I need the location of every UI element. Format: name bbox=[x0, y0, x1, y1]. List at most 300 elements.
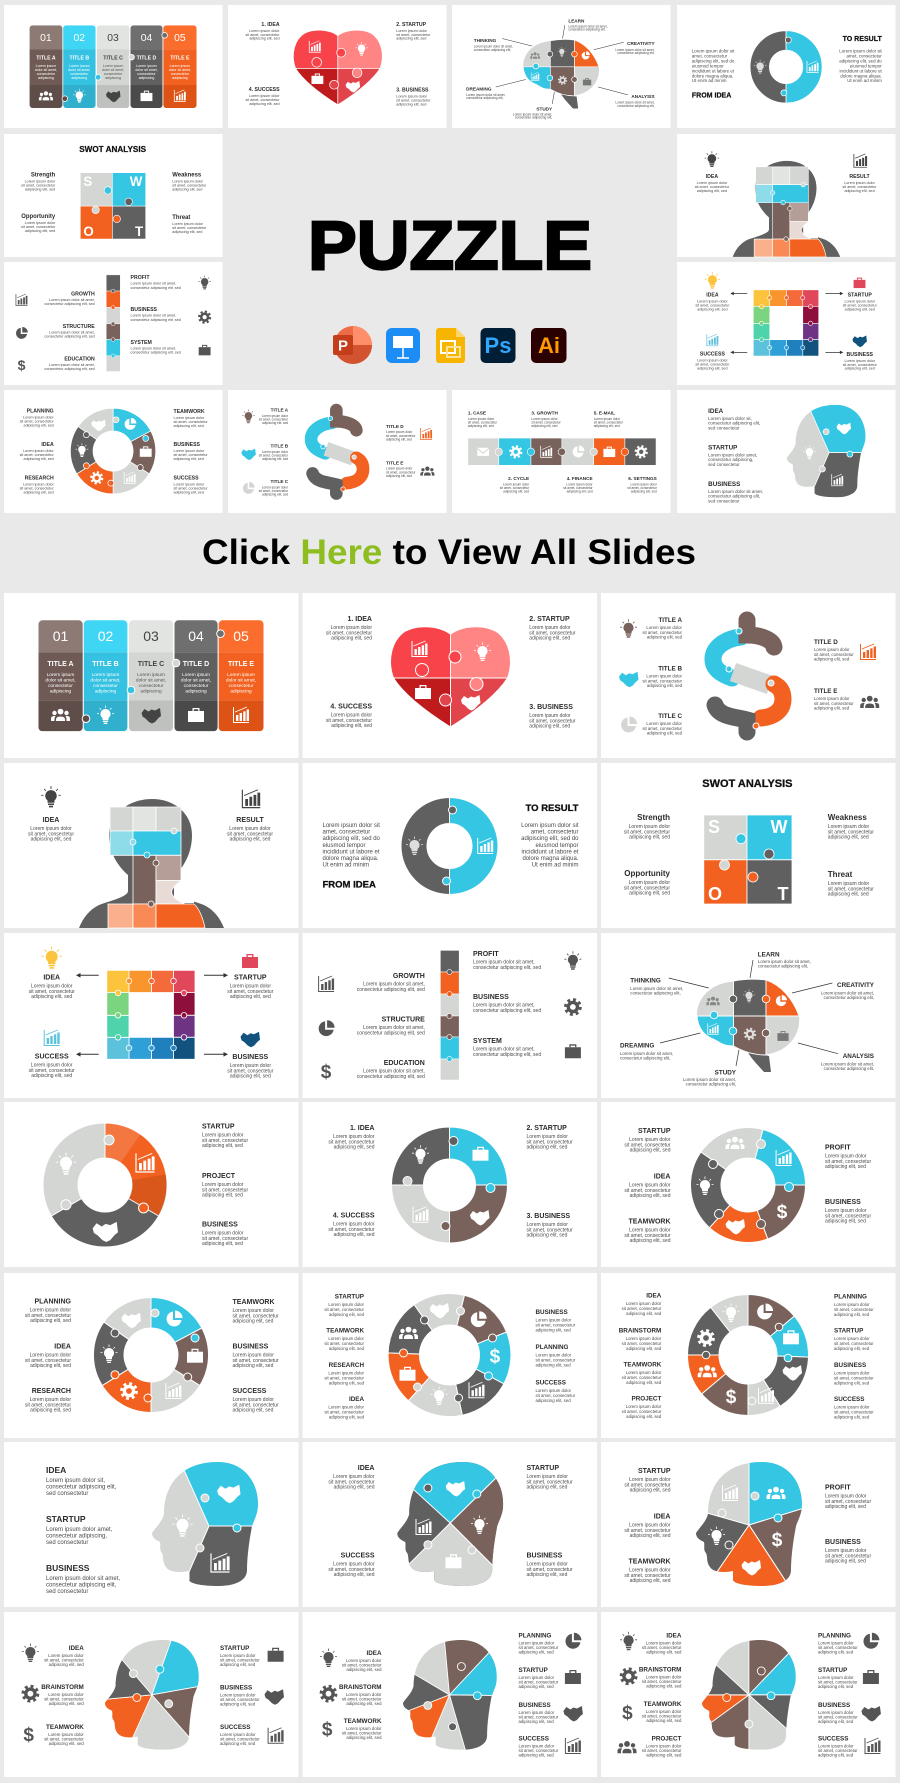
text: research bbox=[324, 1362, 365, 1386]
text: business: BUSINESS bbox=[825, 1539, 861, 1546]
text: research: Lorem ipsum dolor bbox=[30, 1397, 71, 1403]
text: profit: Lorem ipsum dolor bbox=[825, 1154, 867, 1160]
text: study: Lorem ipsum dolor sit amet, bbox=[683, 1077, 736, 1082]
text: success: SUCCESS bbox=[341, 1552, 375, 1560]
text: idea: adipiscing elit, sed bbox=[49, 1662, 84, 1667]
text: idea bbox=[342, 1650, 382, 1672]
text: right paragraph: Ut enim ad minim bbox=[532, 863, 578, 869]
text: success: adipiscing elit, sed bbox=[334, 1572, 375, 1578]
chart: head puzzle bbox=[385, 1622, 509, 1764]
chart: head puzzle bbox=[387, 1442, 512, 1602]
text: threat bbox=[828, 870, 874, 898]
thumbnail text and icons: dolore magna aliqua. bbox=[840, 73, 882, 78]
thumbnail text and icons: BUSINESS bbox=[131, 307, 158, 313]
thumbnail text, arrows and icons: Lorem ipsum dolor bbox=[844, 359, 876, 363]
thumbnail text and icons: sit amet, consectetur bbox=[468, 420, 498, 424]
text: startup: adipiscing elit, sed bbox=[834, 1346, 870, 1351]
text: column bodies: Lorem ipsum bbox=[47, 672, 74, 678]
text: startup: Lorem ipsum dolor bbox=[220, 1653, 256, 1658]
text: business: BUSINESS bbox=[818, 1702, 850, 1709]
text: startup: adipiscing elit, sed bbox=[818, 1684, 854, 1689]
text: idea: adipiscing elit, sed bbox=[329, 1414, 365, 1420]
text: business: Lorem ipsum dolor bbox=[834, 1370, 870, 1376]
text: brainstorm: adipiscing elit, sed bbox=[49, 1701, 84, 1706]
thumbnail text and icons: Lorem ipsum dolor sit amet, bbox=[49, 363, 95, 367]
thumbnail text and icons: Lorem ipsum bbox=[103, 64, 123, 68]
text: startup: sit amet, consectetur bbox=[834, 1341, 874, 1346]
thumbnail text and icons: sit amet, consectetur bbox=[174, 486, 208, 490]
text: profit: PROFIT bbox=[473, 951, 499, 958]
letters: T bbox=[778, 884, 788, 904]
thumbnail text and icons: adipiscing elit, sed bbox=[594, 424, 620, 428]
thumbnail text and icons: Lorem ipsum dolor bbox=[174, 416, 205, 420]
thumbnail: six-part ring bbox=[4, 390, 223, 513]
thumbnail text and icons: sed consectetur bbox=[708, 499, 740, 504]
panel: SWOT bbox=[601, 763, 896, 928]
thumbnail text and icons: SYSTEM bbox=[131, 340, 152, 346]
thumbnail text and icons: $ bbox=[18, 357, 26, 373]
text: idea: sit amet, consectetur bbox=[328, 1139, 375, 1145]
thumbnail text and icons: TITLE A bbox=[36, 55, 56, 61]
panel: heart puzzle bbox=[302, 593, 597, 758]
icons: side icons bbox=[22, 1644, 284, 1746]
thumbnail text and icons: adipiscing bbox=[172, 76, 188, 80]
thumbnail text and icons: sit amet, consectetur bbox=[174, 420, 208, 424]
text: research: adipiscing elit, sed bbox=[329, 1380, 365, 1386]
text: title a: Lorem ipsum dolor bbox=[646, 625, 683, 630]
text: thinking: THINKING bbox=[630, 978, 661, 984]
text: research: adipiscing elit, sed bbox=[30, 1408, 71, 1414]
text: business: Lorem ipsum dolor bbox=[230, 1063, 271, 1069]
text: learn: consectetur adipiscing elit, bbox=[758, 964, 808, 968]
thumbnail text and icons: sit amet, consectetur bbox=[386, 470, 416, 474]
chart: brain puzzle bbox=[696, 979, 800, 1072]
text: business: BUSINESS bbox=[202, 1222, 238, 1228]
text: idea: sit amet, consectetur bbox=[328, 1479, 375, 1485]
icons: ring icons bbox=[412, 1145, 490, 1226]
text: startup bbox=[529, 616, 576, 642]
thumbnail text: Lorem ipsum dolor bbox=[172, 222, 204, 226]
text: success: sit amet, consectetur bbox=[29, 1068, 75, 1074]
text: title e: Lorem ipsum dolor bbox=[814, 696, 850, 701]
text: idea: adipiscing elit, sed bbox=[334, 1145, 375, 1151]
thumbnail text, leaders and icons: Lorem ipsum dolor sit amet, bbox=[513, 112, 552, 116]
text: startup: STARTUP bbox=[335, 1294, 364, 1300]
text: brainstorm: Lorem ipsum dolor bbox=[346, 1692, 382, 1697]
text: business: adipiscing elit, sed bbox=[232, 1363, 274, 1369]
text: column bodies: adipiscing bbox=[50, 688, 71, 694]
text: opportunity: sit amet, consectetur bbox=[624, 885, 670, 891]
text: planning: Lorem ipsum dolor bbox=[536, 1352, 572, 1358]
text: startup: STARTUP bbox=[818, 1667, 847, 1674]
text: business bbox=[536, 1309, 576, 1332]
text: success: Lorem ipsum dolor bbox=[834, 1404, 870, 1410]
text: title b bbox=[642, 666, 683, 688]
text: left paragraph: incididunt ut labore et bbox=[322, 849, 380, 855]
thumbnail text, leaders and icons: Lorem ipsum dolor sit amet, bbox=[474, 44, 513, 48]
text: title b: TITLE B bbox=[658, 666, 682, 672]
text: planning: Lorem ipsum dolor bbox=[30, 1308, 71, 1314]
text: business: sit amet, consectetur bbox=[227, 1068, 274, 1074]
thumbnail text and icons: 2. STARTUP bbox=[396, 22, 427, 28]
thumbnail text and icons: dolor sit amet, bbox=[135, 68, 158, 72]
thumbnail text and icons: incididunt ut labore et bbox=[840, 68, 883, 73]
thumbnail text and icons: adipiscing elit, sed bbox=[249, 102, 280, 106]
text: business: BUSINESS bbox=[473, 994, 509, 1001]
text: startup: sit amet, consectetur bbox=[202, 1138, 248, 1144]
icons: head icons: $ bbox=[772, 1530, 783, 1551]
thumbnail text and icons: Lorem ipsum dolor sit amet, bbox=[49, 298, 95, 302]
text: teamwork: TEAMWORK bbox=[326, 1328, 364, 1334]
thumbnail text bbox=[21, 145, 207, 239]
thumbnail text, leaders and icons: Lorem ipsum dolor sit amet, bbox=[568, 24, 608, 28]
text: weakness: Weakness bbox=[828, 813, 867, 822]
thumbnail text and icons: adipiscing bbox=[139, 76, 154, 80]
text: business bbox=[232, 1344, 279, 1369]
text: teamwork: Lorem ipsum dolor bbox=[48, 1732, 84, 1737]
chart: head puzzle bbox=[686, 1442, 811, 1620]
text: threat: Threat bbox=[828, 870, 853, 879]
text: brainstorm bbox=[339, 1684, 382, 1706]
thumbnail text and icons bbox=[708, 408, 851, 504]
panel: five-part ring bbox=[601, 1102, 896, 1267]
text: planning: PLANNING bbox=[536, 1344, 568, 1351]
text: brainstorm: BRAINSTORM bbox=[41, 1684, 84, 1691]
text: column titles: TITLE C bbox=[138, 661, 164, 668]
thumbnail text: Weakness bbox=[172, 172, 202, 178]
thumbnail text and icons: Lorem ipsum dolor bbox=[844, 181, 876, 185]
text: idea bbox=[28, 817, 74, 843]
text: strength: Strength bbox=[637, 813, 670, 822]
text: brainstorm: sit amet, consectetur bbox=[622, 1341, 662, 1346]
thumbnail text and icons: sit amet, consectetur bbox=[245, 33, 280, 37]
thumbnail text and icons: Lorem ipsum dolor bbox=[503, 482, 530, 486]
text: structure: Lorem ipsum dolor sit amet, bbox=[363, 1025, 425, 1031]
text: brainstorm: Lorem ipsum dolor bbox=[646, 1674, 682, 1680]
text: project: sit amet, consectetur bbox=[202, 1187, 248, 1193]
panel: seven-part ring bbox=[302, 1273, 597, 1438]
text: project: PROJECT bbox=[632, 1396, 661, 1402]
text: startup bbox=[202, 1124, 248, 1149]
thumbnail text and icons: Lorem ipsum dolor bbox=[23, 482, 54, 486]
thumbnail text and icons: adipiscing bbox=[38, 76, 54, 80]
panel: six-part ring bbox=[4, 1273, 298, 1438]
text: success: 4. SUCCESS bbox=[333, 1212, 375, 1220]
thumbnail text and icons: sit amet, consectetur bbox=[563, 486, 594, 490]
thumbnail text and icons: Lorem ipsum dolor bbox=[23, 416, 54, 420]
text: opportunity: Lorem ipsum dolor bbox=[629, 880, 670, 886]
text: idea: sit amet, consectetur bbox=[324, 1410, 365, 1414]
text: planning: adipiscing elit, sed bbox=[818, 1649, 854, 1654]
thumbnail text and icons: STRUCTURE bbox=[63, 324, 95, 330]
text: result: sit amet, consectetur bbox=[227, 831, 273, 837]
text: growth: Lorem ipsum dolor sit amet, bbox=[363, 982, 425, 988]
text: idea: Lorem ipsum dolor sit, bbox=[46, 1478, 105, 1484]
thumbnail text, leaders and icons: consectetur adipiscing elit, bbox=[617, 51, 655, 55]
thumbnail: dollar sign bbox=[228, 390, 447, 513]
text: success: adipiscing elit, sed bbox=[818, 1752, 854, 1757]
text: startup: STARTUP bbox=[234, 974, 267, 982]
icon: Photoshop bbox=[480, 328, 516, 363]
text: profit: PROFIT bbox=[825, 1144, 851, 1152]
text: startup: sit amet, consectetur bbox=[518, 1679, 559, 1684]
thumbnail text: Strength bbox=[31, 172, 56, 178]
text: success: SUCCESS bbox=[220, 1724, 250, 1731]
text: startup: adipiscing elit, sed bbox=[529, 636, 570, 642]
text: planning: sit amet, consectetur bbox=[518, 1645, 559, 1650]
text: startup: sit amet, consectetur bbox=[818, 1679, 858, 1684]
text: business bbox=[818, 1702, 858, 1724]
thumbnail text and icons: TITLE B bbox=[70, 55, 89, 61]
text: success: adipiscing elit, sed bbox=[331, 723, 372, 729]
text: success: SUCCESS bbox=[518, 1736, 549, 1742]
thumbnail text and icons: TITLE C bbox=[103, 55, 123, 61]
text: column bodies: dolor sit amet, bbox=[136, 678, 166, 684]
text: title a bbox=[642, 617, 683, 640]
text: startup: sit amet, consectetur bbox=[526, 1139, 573, 1145]
thumbnail text and icons: Lorem ipsum bbox=[170, 64, 190, 68]
icons: side icons bbox=[318, 951, 581, 1083]
thumbnail text and icons: RESEARCH bbox=[25, 475, 54, 481]
thumbnail text: adipiscing elit, sed bbox=[25, 187, 55, 191]
text: brainstorm: sit amet, consectetur bbox=[342, 1696, 382, 1701]
thumbnail text: adipiscing elit, sed bbox=[172, 230, 202, 234]
text: business bbox=[202, 1222, 248, 1247]
numbers: 05 bbox=[233, 628, 249, 644]
text: dreaming: Lorem ipsum dolor sit amet, bbox=[620, 1051, 673, 1056]
text: idea bbox=[624, 1514, 671, 1539]
text: planning: sit amet, consectetur bbox=[536, 1358, 576, 1362]
text: startup bbox=[818, 1667, 858, 1689]
text: weakness: Lorem ipsum dolor bbox=[828, 824, 870, 830]
text: business: sit amet, consectetur bbox=[220, 1697, 260, 1702]
text: teamwork: sit amet, consectetur bbox=[624, 1573, 671, 1579]
text: business bbox=[825, 1199, 871, 1225]
text: business: Lorem ipsum dolor bbox=[536, 1318, 572, 1322]
thumbnail text and icons: 3. BUSINESS bbox=[396, 87, 429, 93]
chart: ring bbox=[93, 1298, 209, 1412]
text: idea bbox=[642, 1633, 682, 1654]
text: column bodies: dolor sit amet, bbox=[45, 678, 76, 684]
numbers: 03 bbox=[143, 628, 159, 644]
text: planning: sit amet, consectetur bbox=[25, 1313, 71, 1319]
text: idea: adipiscing elit, sed bbox=[646, 1650, 682, 1654]
thumbnail text: sit amet, consectetur bbox=[21, 225, 56, 229]
text: business bbox=[526, 1552, 573, 1578]
thumbnail text and icons: PLANNING bbox=[27, 409, 54, 415]
text: startup: STARTUP bbox=[46, 1514, 86, 1524]
text: success: adipiscing elit, sed bbox=[220, 1741, 256, 1746]
text: teamwork bbox=[642, 1701, 682, 1723]
thumbnail text and icons: consectetur adipiscing elit, bbox=[708, 494, 760, 499]
thumbnail text and icons: Lorem ipsum dolor sit bbox=[692, 49, 735, 54]
text: startup: adipiscing elit, sed bbox=[230, 994, 271, 1000]
text: business: BUSINESS bbox=[536, 1309, 568, 1316]
panel: head eight parts with icons bbox=[601, 1612, 896, 1777]
text: success bbox=[834, 1396, 874, 1420]
text: teamwork bbox=[44, 1724, 84, 1746]
text: thinking: consectetur adipiscing elit, bbox=[630, 990, 681, 996]
text: brainstorm: adipiscing elit, sed bbox=[346, 1701, 382, 1706]
thumbnail text and icons: Ut enim ad minim bbox=[847, 78, 882, 83]
text: title b: sit amet, consectetur bbox=[642, 678, 683, 683]
text: startup: sed consectetur bbox=[46, 1540, 88, 1546]
text: teamwork bbox=[624, 1558, 671, 1584]
thumbnail text, arrows and icons: adipiscing elit, sed bbox=[845, 307, 875, 312]
panel: eight-part ring bbox=[601, 1273, 896, 1438]
text: teamwork bbox=[624, 1218, 671, 1244]
icons: square corners bbox=[42, 947, 260, 1047]
text: startup: Lorem ipsum dolor bbox=[230, 984, 271, 990]
text: startup: Lorem ipsum dolor amet, bbox=[46, 1527, 113, 1533]
text: business: adipiscing elit, sed bbox=[202, 1241, 243, 1247]
text: project: Lorem ipsum dolor bbox=[646, 1744, 682, 1748]
text: startup: Lorem ipsum dolor bbox=[328, 1302, 365, 1307]
icons: ring icons: $ bbox=[726, 1387, 737, 1408]
text: business: Lorem ipsum dolor sit amet, bbox=[473, 1002, 535, 1008]
text: brainstorm: sit amet, consectetur bbox=[642, 1679, 682, 1684]
thumbnail text, leaders and icons: LEARN bbox=[568, 18, 585, 24]
thumbnail text, arrows and icons: BUSINESS bbox=[847, 352, 874, 358]
icon: PowerPoint: P bbox=[338, 338, 348, 354]
text: planning: PLANNING bbox=[818, 1632, 851, 1640]
thumbnail text and icons: TITLE A bbox=[271, 408, 289, 413]
text: startup bbox=[624, 1468, 671, 1494]
text: left paragraph: amet, consectetur bbox=[322, 830, 370, 836]
thumbnail text and icons: dolor sit amet, bbox=[35, 68, 57, 72]
text: teamwork: Lorem ipsum dolor bbox=[646, 1709, 682, 1714]
text: idea: sit amet, consectetur bbox=[25, 1358, 71, 1364]
text: business: adipiscing elit, sed bbox=[825, 1219, 866, 1225]
thumbnail text and icons bbox=[468, 411, 658, 494]
text: creativity: CREATIVITY bbox=[837, 982, 875, 989]
text: column bodies: dolor sit amet, bbox=[90, 678, 121, 684]
text: weakness: sit amet, consectetur bbox=[828, 829, 874, 835]
thumbnail text, arrows and icons: adipiscing elit, sed bbox=[845, 367, 875, 371]
panel: head five parts bbox=[601, 1442, 896, 1620]
thumbnail text and icons: adipiscing elit, sed bbox=[24, 490, 54, 494]
thumbnail text and icons: Lorem ipsum dolor bbox=[531, 417, 559, 421]
thumbnail text and icons: 6. SETTINGS bbox=[628, 476, 657, 481]
thumbnail text and icons: Lorem ipsum dolor bbox=[174, 482, 205, 486]
text: success: SUCCESS bbox=[232, 1388, 267, 1395]
text: teamwork: sit amet, consectetur bbox=[622, 1375, 662, 1380]
text: brainstorm: BRAINSTORM bbox=[339, 1684, 382, 1691]
text: success: SUCCESS bbox=[35, 1054, 69, 1060]
text: idea: adipiscing elit, sed bbox=[331, 636, 372, 642]
text: success: Lorem ipsum dolor bbox=[536, 1388, 572, 1393]
thumbnail text and icons: Lorem ipsum dolor bbox=[396, 94, 428, 98]
text: teamwork: adipiscing elit, sed bbox=[49, 1741, 84, 1746]
text: success: adipiscing elit, sed bbox=[536, 1398, 571, 1403]
thumbnail text and icons: sit amet, consectetur bbox=[259, 417, 289, 421]
text: startup bbox=[324, 1294, 365, 1317]
text: threat: sit amet, consectetur bbox=[828, 886, 874, 892]
chart: two part donut bbox=[401, 798, 498, 894]
thumbnail text and icons: sit amet, consectetur bbox=[20, 453, 54, 457]
thumbnail text and icons: Lorem ipsum dolor bbox=[174, 449, 205, 453]
text: business: Lorem ipsum dolor bbox=[232, 1352, 274, 1358]
thumbnail text and icons: sit amet, consectetur bbox=[20, 420, 54, 424]
text: dreaming bbox=[620, 1042, 673, 1060]
text: education: consectetur adipiscing elit, sed bbox=[357, 1074, 425, 1080]
text: success bbox=[536, 1380, 576, 1403]
text: title c: adipiscing elit, sed bbox=[647, 731, 683, 736]
text: project bbox=[622, 1396, 662, 1419]
text: column bodies: consectetur bbox=[93, 683, 118, 689]
thumbnail text and icons: dolor sit amet, bbox=[68, 68, 90, 72]
panel: brain bbox=[601, 933, 896, 1098]
thumbnail text and icons: Lorem ipsum dolor bbox=[262, 450, 289, 454]
text: startup: Lorem ipsum dolor bbox=[529, 625, 571, 631]
thumbnail text and icons: adipiscing bbox=[105, 76, 121, 80]
text: right paragraph: dolore magna aliqua. bbox=[522, 856, 579, 862]
text: business: sit amet, consectetur bbox=[825, 1213, 871, 1219]
thumbnail text and icons: IDEA bbox=[706, 174, 718, 180]
text: study: STUDY bbox=[715, 1070, 737, 1076]
text: teamwork: TEAMWORK bbox=[344, 1718, 382, 1725]
text: business: adipiscing elit, sed bbox=[518, 1719, 554, 1724]
thumbnail text and icons: Lorem ipsum dolor bbox=[249, 29, 280, 33]
text: success: sit amet, consectetur bbox=[536, 1393, 576, 1398]
thumbnail text and icons: consectetur bbox=[70, 72, 89, 76]
text: research: sit amet, consectetur bbox=[324, 1376, 365, 1380]
text: business: Lorem ipsum dolor bbox=[818, 1710, 854, 1715]
text: title d: adipiscing elit, sed bbox=[814, 657, 850, 662]
thumbnail text, arrows and icons: Lorem ipsum dolor bbox=[697, 300, 728, 304]
thumbnail text, arrows and icons bbox=[695, 272, 878, 371]
text: startup bbox=[46, 1514, 113, 1546]
icons: brain icons bbox=[706, 989, 789, 1041]
panel: vertical chain bbox=[302, 933, 597, 1098]
text: startup: sit amet, consectetur bbox=[220, 1657, 260, 1662]
thumbnail text: Lorem ipsum dolor bbox=[25, 221, 56, 225]
thumbnail text and icons: adipiscing elit, sed bbox=[174, 490, 204, 494]
thumbnail text and icons: TO RESULT bbox=[843, 36, 882, 43]
thumbnail text and icons: consectetur bbox=[137, 72, 156, 76]
text: idea bbox=[326, 616, 372, 642]
icons: ring icons bbox=[56, 1153, 155, 1242]
text: idea: adipiscing elit, sed bbox=[31, 994, 72, 1000]
panel: three-part ring bbox=[4, 1102, 298, 1267]
text: brainstorm bbox=[41, 1684, 84, 1706]
text: planning: adipiscing elit, sed bbox=[30, 1318, 71, 1324]
text: success: sit amet, consectetur bbox=[328, 1227, 375, 1233]
thumbnail text, leaders and icons: Lorem ipsum dolor sit amet, bbox=[615, 101, 655, 105]
thumbnail text and icons: consectetur adipiscing elit, sed bbox=[44, 367, 95, 371]
text: project: PROJECT bbox=[652, 1736, 682, 1742]
text: growth: GROWTH bbox=[393, 973, 425, 980]
text: idea: Lorem ipsum dolor bbox=[331, 625, 372, 631]
text: success: sit amet, consectetur bbox=[518, 1748, 559, 1753]
text: business: adipiscing elit, sed bbox=[818, 1719, 854, 1724]
text: learn: Lorem ipsum dolor sit amet, bbox=[758, 959, 811, 964]
text: brainstorm: adipiscing elit, sed bbox=[646, 1683, 682, 1688]
panel: numbered cards bbox=[4, 593, 298, 758]
heading: to result: TO RESULT bbox=[526, 803, 579, 814]
text: profit: adipiscing elit, sed bbox=[825, 1164, 866, 1170]
text: study bbox=[683, 1070, 737, 1086]
text: startup: Lorem ipsum dolor bbox=[629, 1137, 671, 1143]
text: startup: Lorem ipsum dolor bbox=[834, 1336, 870, 1341]
thumbnail text and icons: adipiscing elit, sed do bbox=[839, 59, 882, 64]
thumbnail text and icons: Lorem ipsum dolor bbox=[594, 417, 621, 421]
text: teamwork: sit amet, consectetur bbox=[44, 1736, 84, 1741]
leader lines bbox=[660, 960, 838, 1066]
text: planning: PLANNING bbox=[834, 1294, 867, 1300]
text: left paragraph: eiusmod tempor bbox=[322, 843, 366, 849]
text: idea: sit amet, consectetur bbox=[624, 1528, 671, 1534]
